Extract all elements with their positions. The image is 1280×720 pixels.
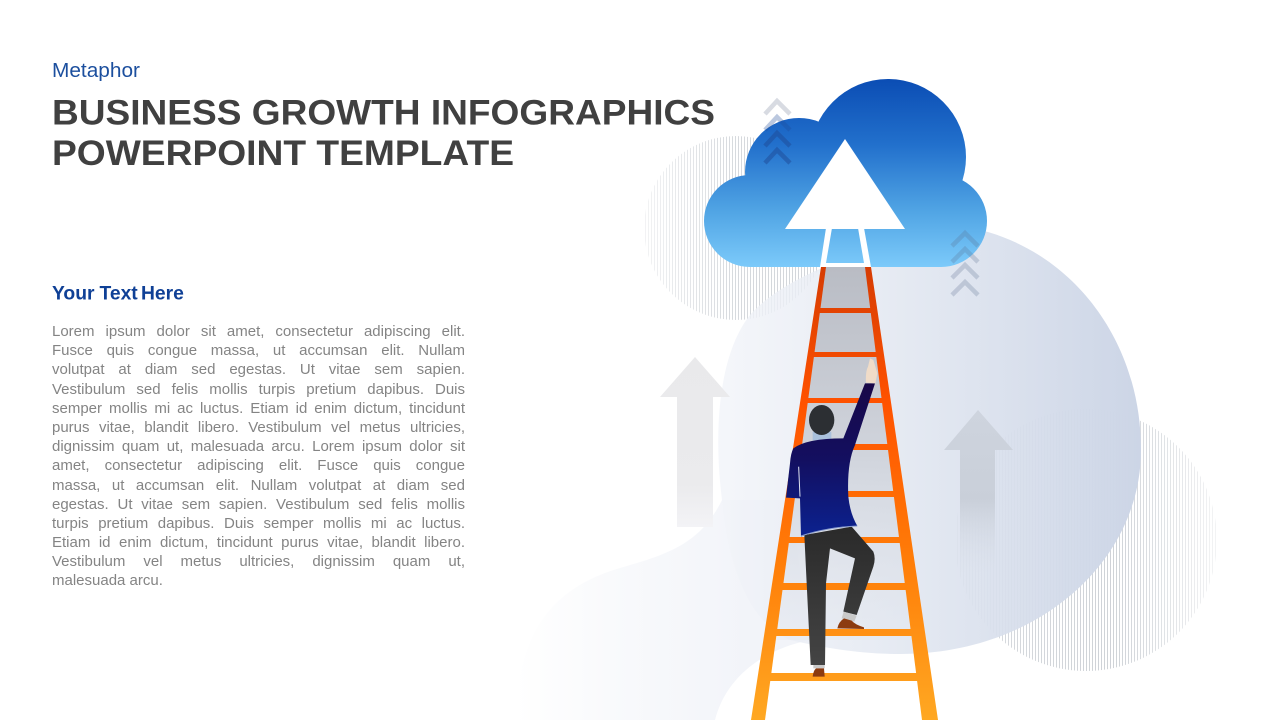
- body text: Fusce quis congue massa, ut accumsan elit. Nullam: [52, 342, 465, 359]
- body text: purus vitae, blandit libero. Vestibulum vel metus ultricies,: [52, 419, 465, 436]
- heading: Your Text Here: Here: [141, 284, 184, 304]
- body text: malesuada arcu.: [52, 572, 163, 589]
- body text: Vestibulum sed felis mollis turpis pretium dapibus. Duis: [52, 381, 465, 398]
- cloud arrow: [785, 139, 905, 267]
- arrow: right background: [944, 410, 1013, 572]
- body text: turpis pretium dapibus. Duis semper mollis mi ac luctus.: [52, 515, 465, 532]
- body text: massa, ut accumsan elit. Nullam volutpat at diam sed: [52, 476, 465, 494]
- heading: Your Text Here: Your: [52, 284, 100, 304]
- body text: egestas. Ut vitae sem sapien. Vestibulum sed felis mollis: [52, 496, 465, 513]
- body text: Vestibulum vel metus ultricies, dignissim quam ut,: [52, 553, 465, 570]
- background lobe: lower left: [515, 500, 810, 720]
- arrow: left background: [660, 357, 730, 527]
- subtitle: Metaphor: Metaphor: [52, 60, 140, 82]
- body text: volutpat at diam sed egestas. Ut vitae sem sapien.: [52, 361, 465, 378]
- body text: Lorem ipsum dolor sit amet, consectetur adipiscing elit.: [52, 323, 465, 340]
- businessman: [786, 358, 877, 677]
- hatched circle: left: [644, 136, 828, 320]
- title: BUSINESS GROWTH INFOGRAPHICS: [52, 92, 715, 132]
- chevrons: right: [952, 233, 978, 295]
- title: [52, 92, 715, 173]
- body text: semper mollis mi ac luctus. Etiam id enim dictum, tincidunt: [52, 400, 465, 417]
- background blob: [718, 226, 1141, 654]
- body text: dignissim quam ut, malesuada arcu. Lorem ipsum dolor sit: [52, 438, 465, 455]
- chevrons: top left: [765, 101, 790, 163]
- cloud: [704, 79, 987, 267]
- title: POWERPOINT TEMPLATE: [52, 133, 514, 173]
- ladder: [751, 267, 938, 720]
- heading: Your Text Here: Text: [100, 284, 143, 304]
- body text: Etiam id enim dictum, tincidunt purus vitae, blandit libero.: [52, 534, 465, 551]
- body text: [52, 323, 465, 589]
- body text: amet, consectetur adipiscing elit. Fusce quis congue: [52, 457, 465, 474]
- hatched circle: right: [999, 420, 1216, 671]
